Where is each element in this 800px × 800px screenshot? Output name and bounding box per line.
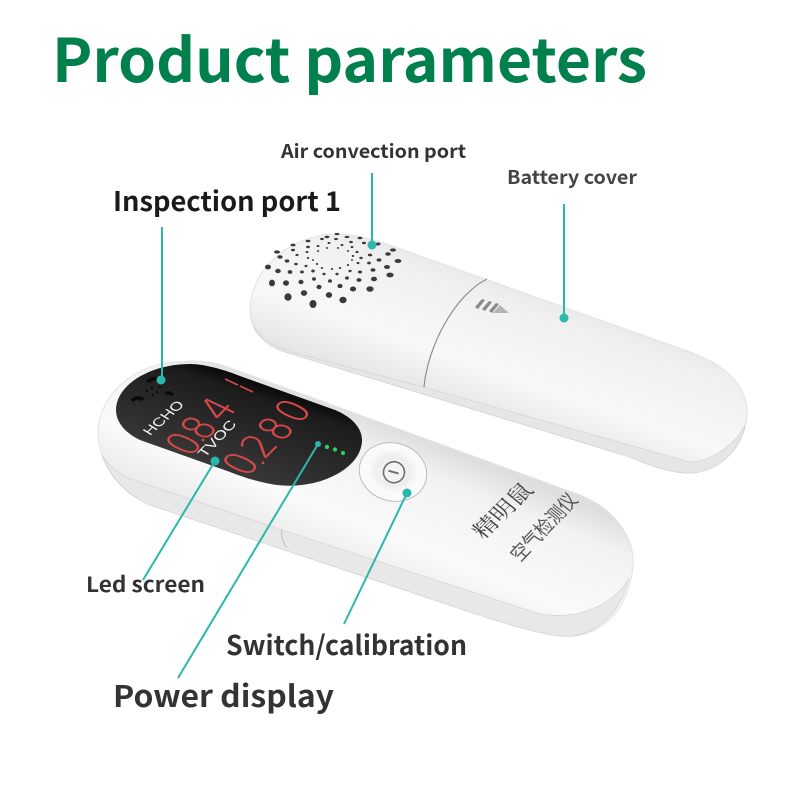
leader: LED screen [143,456,220,580]
HCHO reading: 0 [155,426,213,462]
title: Product parameters [52,13,647,100]
TVOC reading: 2 [230,428,288,464]
leader: inspection port 1 [156,227,166,384]
label: inspection port 1: Inspection port 1 [113,180,341,219]
device: front view with screen [98,361,633,636]
front body lower rim [102,455,629,636]
front body shell [98,361,633,636]
brand name on device: 精明鼠 [464,475,540,544]
TVOC reading [212,393,322,482]
label: switch calibration: Switch/calibration [226,624,467,663]
leader: air convection port [368,173,376,250]
inspection port holes [131,377,174,402]
speaker holes: air convection port [265,233,401,308]
HCHO reading [155,379,253,462]
TVOC reading: 0 [264,393,322,429]
HCHO reading: 8 [170,410,228,446]
TVOC reading: 0 [212,446,270,482]
rear body shell [250,234,747,473]
label: LED screen: Led screen [86,569,205,599]
label: power display: Power display [113,672,334,716]
LED screen panel [116,364,362,486]
label: air convection port: Air convection port [280,137,466,164]
battery cover seam [424,279,487,387]
leader: power display [178,441,321,678]
HCHO reading: 4 [189,391,247,427]
rear body lower rim [253,326,745,473]
device: rear view with battery cover [250,233,747,473]
battery cover arrow mark [475,299,509,313]
leader: switch calibration [344,488,412,624]
screen label: HCHO: HCHO [139,398,188,438]
power indicator dots [315,441,345,455]
product name on device: 空气检测仪 [502,487,584,567]
TVOC reading: 8 [247,411,305,447]
power button [353,435,433,509]
label: battery cover: Battery cover [507,163,638,190]
leader: battery cover [560,204,568,322]
screen label: TVOC: TVOC [194,417,240,460]
